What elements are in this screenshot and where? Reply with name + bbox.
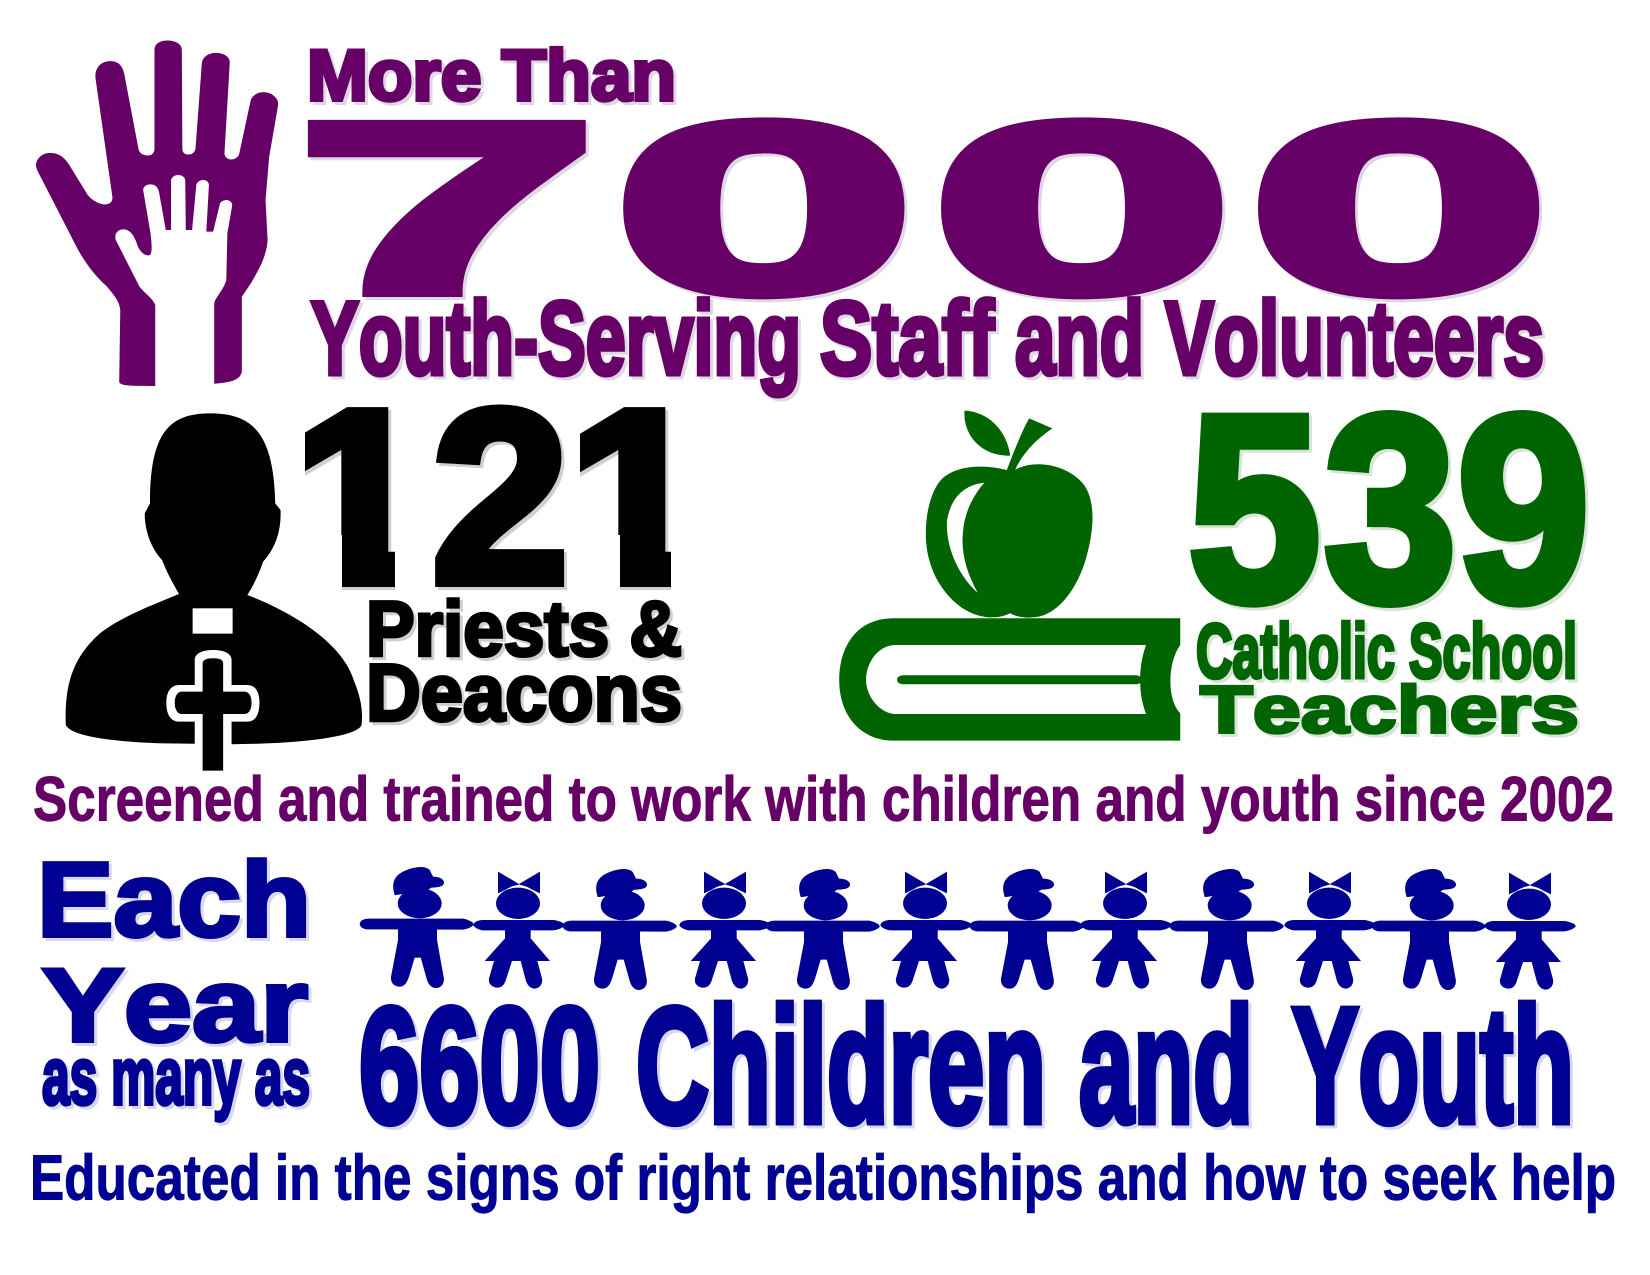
apple highlight bbox=[947, 483, 984, 593]
text: as many as: as many as bbox=[42, 1032, 310, 1122]
stat: 539: 539 bbox=[1188, 361, 1590, 657]
book pages bbox=[866, 645, 1146, 714]
stat: 121: 2 bbox=[432, 359, 569, 635]
stat: 121: 1 bbox=[285, 359, 432, 635]
stat: 6600 Children and Youth: Children bbox=[636, 974, 1046, 1157]
child 10 bbox=[1284, 872, 1376, 989]
apple leaf bbox=[964, 411, 1010, 456]
child 3 bbox=[563, 869, 677, 990]
stat: 6600 Children and Youth bbox=[359, 974, 1574, 1157]
stat: 121: 1 bbox=[562, 359, 709, 635]
label: Teachers: Teachers bbox=[1200, 672, 1579, 748]
book page line bbox=[897, 675, 1142, 684]
cross outline bbox=[166, 650, 259, 745]
book bbox=[839, 618, 1180, 741]
heading: Youth-Serving Staff and Volunteers bbox=[311, 281, 1544, 397]
cross bbox=[175, 658, 252, 771]
child 12 bbox=[1484, 873, 1576, 990]
clerical collar bbox=[193, 608, 233, 634]
child 2 bbox=[473, 872, 565, 989]
child 6 bbox=[880, 872, 972, 989]
child 4 bbox=[679, 872, 771, 989]
icon: apple on a book bbox=[839, 411, 1180, 741]
apple stem bbox=[1007, 418, 1052, 471]
heading: More Than: More Than bbox=[307, 36, 676, 116]
stat: 6600 Children and Youth: and bbox=[1079, 974, 1253, 1157]
apple bbox=[926, 464, 1092, 618]
label: Deacons: Deacons bbox=[366, 648, 682, 738]
child 5 bbox=[766, 869, 880, 990]
big number: 7000: 7000 bbox=[296, 73, 1550, 344]
child hand cut-out bbox=[115, 175, 232, 392]
child 7 bbox=[970, 869, 1084, 990]
child 8 bbox=[1080, 872, 1172, 989]
stat: 121 bbox=[285, 359, 715, 635]
child 1 bbox=[360, 867, 474, 988]
heading: Youth-Serving Staff and Volunteers: Youth-Serving bbox=[311, 281, 801, 397]
label: Priests &: Priests & bbox=[366, 584, 682, 672]
icon: adult hand with child hand bbox=[37, 41, 277, 392]
heading: Each: Each bbox=[37, 841, 311, 959]
icon: priest silhouette with collar and cross bbox=[66, 413, 362, 771]
heading: Youth-Serving Staff and Volunteers: Staff bbox=[820, 281, 994, 397]
stat: 6600 Children and Youth: 6600 bbox=[359, 974, 600, 1157]
child 11 bbox=[1372, 869, 1486, 990]
icon: row of paper-doll children holding hands bbox=[360, 867, 1576, 990]
heading: Youth-Serving Staff and Volunteers: and bbox=[1015, 281, 1144, 397]
heading: Year: Year bbox=[42, 948, 308, 1064]
child 9 bbox=[1170, 869, 1284, 990]
